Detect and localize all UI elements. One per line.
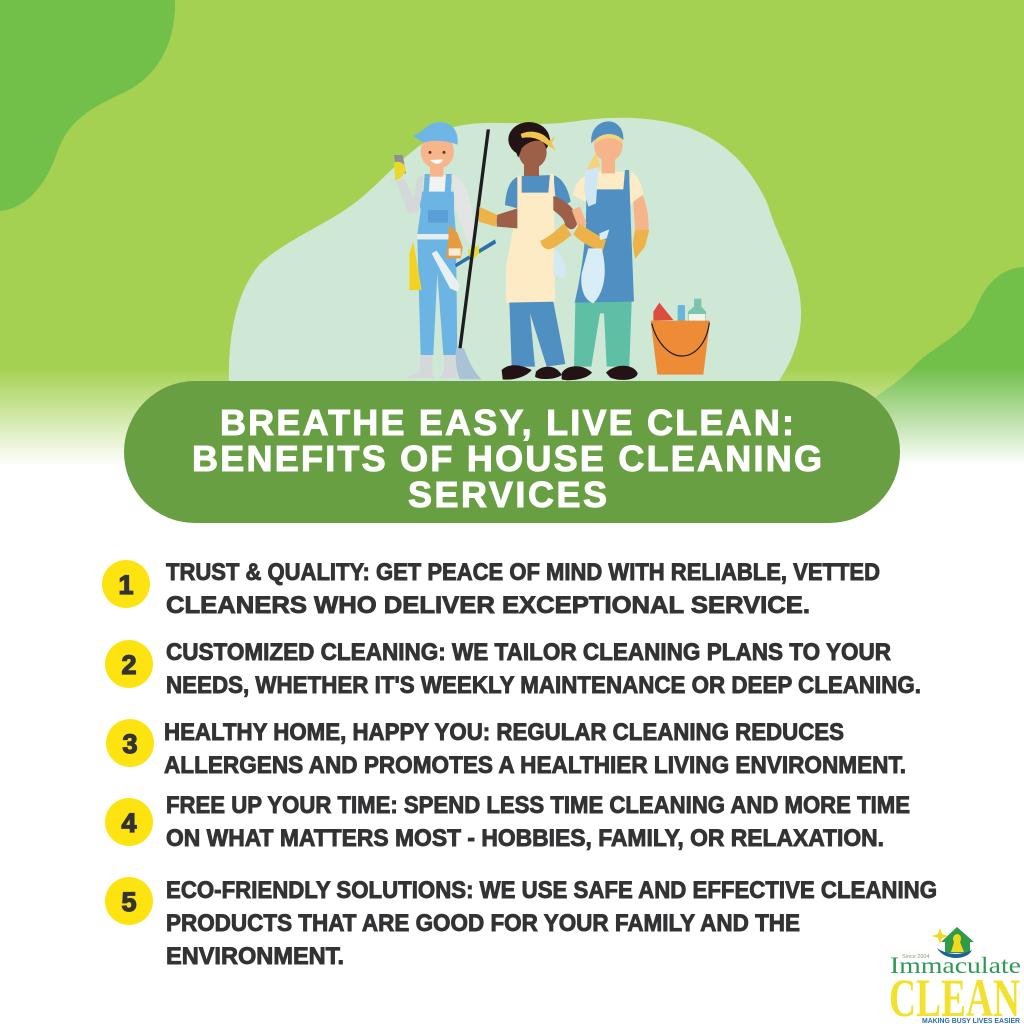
background blob: right [860, 267, 1024, 466]
logo: Immaculate Clean [889, 927, 1021, 1024]
mop [456, 129, 490, 379]
title banner [124, 381, 900, 523]
item 3 [106, 719, 906, 779]
item 1 text [166, 559, 880, 619]
background blob: top left [0, 0, 175, 211]
item 2 text [166, 639, 921, 699]
item 1 [102, 559, 880, 619]
item 1 text: TRUST & QUALITY: GET PEACE OF MIND WITH RELIABLE, VETTED [166, 559, 880, 586]
item 4 text: ON WHAT MATTERS MOST - HOBBIES, FAMILY, OR RELAXATION. [166, 825, 884, 852]
item 2: 2 [121, 650, 137, 680]
item 2 [105, 639, 921, 699]
item 5 text [166, 877, 937, 970]
logo icon: house [932, 927, 974, 958]
item 1: 1 [118, 570, 134, 600]
number badge 5 [105, 877, 153, 925]
number badge 2 [105, 640, 153, 688]
item 5 text: ENVIRONMENT. [166, 943, 344, 970]
item 3: 3 [122, 729, 138, 759]
number badge 4 [105, 798, 153, 846]
item 2 text: CUSTOMIZED CLEANING: WE TAILOR CLEANING PLANS TO YOUR [166, 639, 891, 666]
cleaner 2 with apron [479, 122, 577, 380]
title: SERVICES [408, 474, 607, 515]
title: BREATHE EASY, LIVE CLEAN: [220, 402, 794, 443]
item 1 text: CLEANERS WHO DELIVER EXCEPTIONAL SERVICE. [166, 592, 810, 619]
item 4: 4 [121, 808, 137, 838]
background: green field [0, 0, 1024, 466]
cleaner 1 with cap and phone [394, 122, 496, 378]
item 4 [105, 792, 910, 852]
item 5 text: PRODUCTS THAT ARE GOOD FOR YOUR FAMILY AND THE [166, 910, 800, 937]
item 5: 5 [121, 887, 137, 917]
item 5 [105, 877, 937, 970]
item 3 text [164, 719, 906, 779]
item 2 text: NEEDS, WHETHER IT'S WEEKLY MAINTENANCE OR DEEP CLEANING. [166, 672, 921, 699]
title: BENEFITS OF HOUSE CLEANING [192, 438, 822, 479]
logo text: Since 2004 [902, 954, 930, 960]
title [192, 402, 822, 515]
item 4 text: FREE UP YOUR TIME: SPEND LESS TIME CLEANING AND MORE TIME [166, 792, 910, 819]
cleaner 3 with blue apron [562, 121, 649, 380]
pale blob behind cleaners [229, 118, 801, 382]
logo: Immaculate Clean: Immaculate [890, 953, 1021, 978]
bucket with bottles [651, 299, 710, 375]
number badge 1 [102, 560, 150, 608]
number badge 3 [106, 719, 154, 767]
background fade to white [0, 368, 1024, 466]
item 3 text: ALLERGENS AND PROMOTES A HEALTHIER LIVING ENVIRONMENT. [164, 752, 906, 779]
illustration: three cleaners [394, 121, 710, 380]
item 5 text: ECO-FRIENDLY SOLUTIONS: WE USE SAFE AND EFFECTIVE CLEANING [166, 877, 937, 904]
item 4 text [166, 792, 910, 852]
item 3 text: HEALTHY HOME, HAPPY YOU: REGULAR CLEANING REDUCES [164, 719, 844, 746]
